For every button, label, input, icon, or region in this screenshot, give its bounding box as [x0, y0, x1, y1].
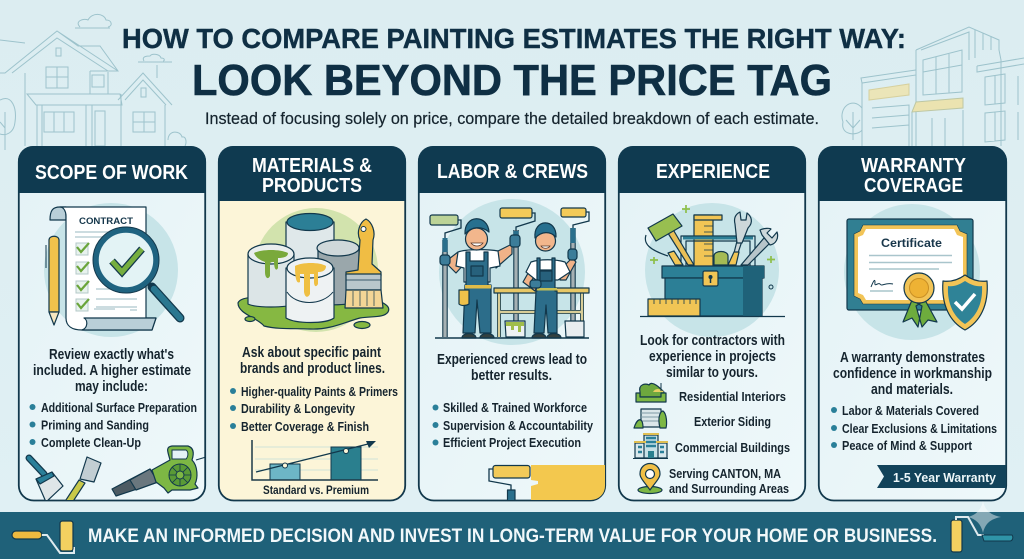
label: exterior siding: Exterior Siding — [694, 414, 771, 429]
body text: Experienced crews lead to — [437, 352, 587, 368]
icon: contract and magnifier — [44, 203, 180, 337]
panel: warranty coverage — [818, 146, 1007, 500]
body text: experience in projects — [649, 349, 776, 365]
panel: labor and crews — [418, 146, 606, 502]
icon: painters — [430, 199, 589, 345]
body text — [240, 345, 385, 377]
body text: Ask about specific paint — [242, 345, 381, 361]
body text — [33, 347, 191, 395]
label: service area — [669, 466, 789, 496]
heading: labor and crews: LABOR & CREWS — [437, 161, 588, 183]
heading: warranty coverage: WARRANTY — [861, 155, 967, 177]
heading: experience: EXPERIENCE — [656, 161, 770, 183]
bullet list — [230, 384, 398, 434]
heading: scope of work: SCOPE OF WORK — [35, 162, 188, 184]
bullet list: Skilled & Trained Workforce — [443, 400, 587, 415]
bullet list — [30, 400, 197, 450]
body text: better results. — [471, 368, 552, 384]
worker left — [440, 219, 520, 338]
body text: Review exactly what's — [49, 347, 174, 363]
body text: confidence in workmanship — [833, 366, 992, 382]
title: HOW TO COMPARE PAINTING ESTIMATES THE RIGHT WAY: — [122, 23, 906, 54]
panel: materials and products — [218, 146, 406, 500]
bullet list: Better Coverage & Finish — [241, 419, 369, 434]
icon: location pin — [638, 464, 662, 494]
heading: warranty coverage — [861, 155, 967, 197]
icon: paint roller right — [951, 517, 1013, 552]
chart: standard vs premium — [252, 440, 378, 497]
background illustration: house sketch — [0, 14, 186, 150]
icon: siding — [634, 409, 667, 428]
icon: paint cans and brush — [238, 208, 389, 332]
icon: certificate and shield: Certificate — [881, 238, 942, 250]
panel: experience — [618, 146, 806, 500]
bullet list: Labor & Materials Covered — [842, 403, 979, 418]
bullet list — [432, 400, 594, 450]
subtitle: Instead of focusing solely on price, compare the detailed breakdown of each estimate. — [205, 110, 819, 128]
background illustration: commercial buildings sketch — [842, 27, 1024, 146]
bullet list: Complete Clean-Up — [41, 435, 141, 450]
roller poles — [430, 208, 589, 337]
body text: and materials. — [871, 382, 953, 398]
heading: warranty coverage: COVERAGE — [864, 175, 963, 197]
heading: materials and products: PRODUCTS — [262, 175, 362, 197]
label: service area: Serving CANTON, MA — [669, 466, 782, 481]
label: service area: and Surrounding Areas — [669, 481, 789, 496]
body text: brands and product lines. — [240, 361, 385, 377]
body text — [437, 352, 587, 384]
title — [122, 23, 906, 105]
bullet list: Higher-quality Paints & Primers — [241, 384, 398, 399]
body text: Look for contractors with — [640, 333, 785, 349]
worker right — [523, 223, 577, 338]
body text — [640, 333, 785, 381]
icon: contract and magnifier: CONTRACT — [79, 216, 133, 227]
icon: sparkle — [968, 501, 1001, 533]
chart label: Standard vs. Premium — [263, 483, 369, 497]
title: LOOK BEYOND THE PRICE TAG — [192, 56, 832, 105]
icon: toolbox — [640, 203, 785, 337]
body text: A warranty demonstrates — [840, 350, 985, 366]
bullet list: Priming and Sanding — [41, 418, 149, 432]
body text: may include: — [75, 379, 148, 395]
heading: materials and products: MATERIALS & — [252, 155, 372, 177]
warranty banner — [877, 465, 1006, 488]
bullet list: Additional Surface Preparation — [41, 400, 197, 415]
footer message: MAKE AN INFORMED DECISION AND INVEST IN LONG-TERM VALUE FOR YOUR HOME OR BUSINESS. — [88, 526, 937, 547]
icon: sofa — [636, 383, 666, 402]
body text: similar to yours. — [666, 365, 758, 381]
panel: scope of work — [18, 146, 206, 503]
bullet list — [831, 403, 997, 453]
heading: materials and products — [252, 155, 372, 197]
icon: tools — [29, 446, 206, 503]
icon: paint roller stroke — [489, 465, 606, 502]
footer banner — [0, 501, 1024, 559]
icon: paint roller left — [12, 521, 74, 553]
warranty banner: 1-5 Year Warranty — [893, 470, 997, 485]
label: commercial buildings: Commercial Buildings — [675, 440, 790, 455]
body text — [833, 350, 992, 398]
icon: commercial building — [633, 434, 668, 458]
bullet list: Peace of Mind & Support — [842, 438, 973, 453]
label: residential interiors: Residential Interiors — [679, 389, 786, 404]
bullet list: Efficient Project Execution — [443, 435, 581, 450]
bullet list: Durability & Longevity — [241, 401, 356, 416]
table — [494, 288, 589, 337]
body text: included. A higher estimate — [33, 363, 191, 379]
bullet list: Supervision & Accountability — [443, 418, 594, 433]
icon: certificate and shield — [844, 204, 987, 340]
